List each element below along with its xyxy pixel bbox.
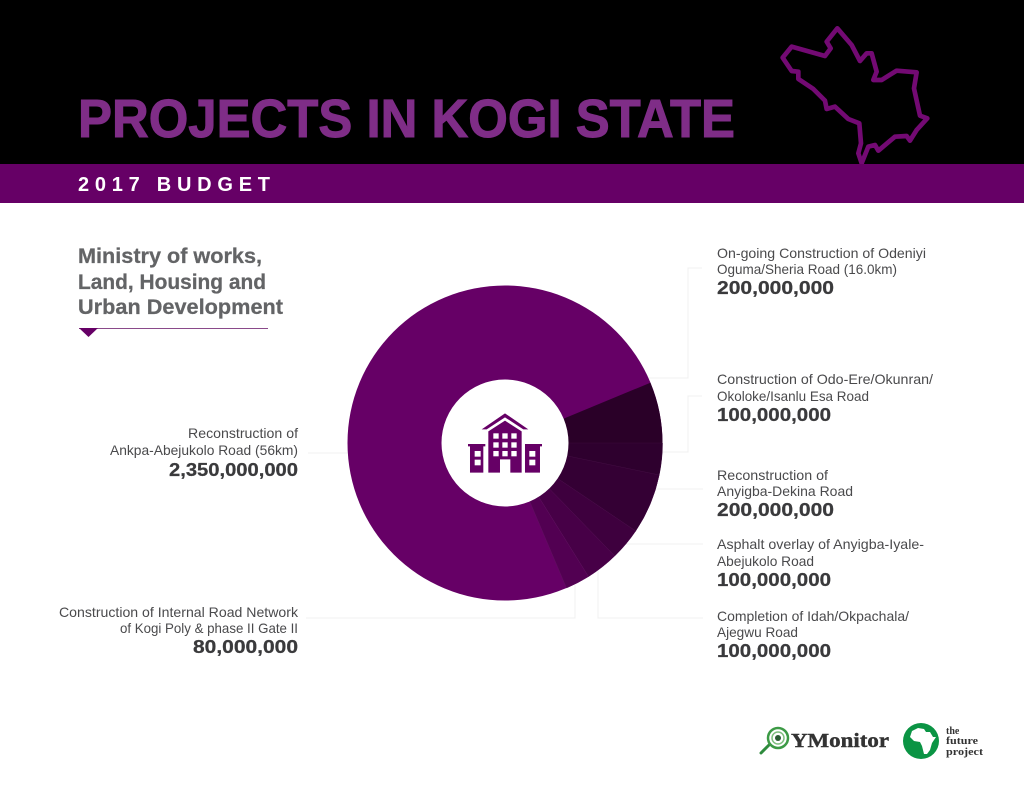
heading: ministry [78, 245, 283, 319]
label: Odeniyi: Oguma/Sheria Road (16.0km) [717, 261, 897, 277]
slice: Ankpa-Abejukolo [348, 286, 662, 600]
label: Ankpa-Abejukolo: Reconstruction of [188, 425, 298, 441]
slice: Odo-Ere [505, 443, 662, 475]
label: Ankpa-Abejukolo: Ankpa-Abejukolo Road (56km) [110, 442, 298, 458]
heading: ministry: Ministry of works, [78, 245, 262, 268]
label: Asphalt overlay: 100,000,000 [717, 570, 831, 590]
logo: YMonitor: YMonitor [791, 730, 889, 752]
slice: Kogi Poly [505, 443, 588, 588]
label: Odeniyi: 200,000,000 [717, 278, 834, 298]
heading: ministry: Land, Housing and [78, 271, 266, 294]
label: Odo-Ere: Construction of Odo-Ere/Okunran/ [717, 371, 933, 387]
leader lines [306, 268, 703, 618]
label: Odo-Ere: Okoloke/Isanlu Esa Road [717, 388, 869, 404]
label: Kogi Poly [59, 604, 299, 657]
label: Odo-Ere [717, 371, 933, 425]
label: Anyigba-Dekina: Reconstruction of [717, 467, 828, 483]
subtitle: 2017 BUDGET [78, 174, 270, 196]
label: Idah [717, 608, 909, 661]
title: PROJECTS IN KOGI STATE [78, 89, 735, 149]
centre hole [442, 380, 568, 506]
label: Anyigba-Dekina [717, 467, 853, 520]
label: Kogi Poly: Construction of Internal Road Network [59, 604, 299, 620]
subtitle band [0, 164, 1024, 203]
label: Odeniyi [717, 245, 926, 298]
label: Odo-Ere: 100,000,000 [717, 405, 831, 425]
header band [0, 0, 1024, 164]
slice: Odeniyi [505, 383, 662, 443]
label: Kogi Poly: of Kogi Poly & phase II Gate II [120, 620, 298, 636]
slice: Anyigba-Dekina [505, 443, 659, 531]
logo: the future project: project [946, 747, 984, 758]
label: Idah: Completion of Idah/Okpachala/ [717, 608, 909, 624]
icon: building [468, 413, 542, 473]
icon: Kogi state map outline [783, 28, 927, 163]
label: Asphalt overlay: Abejukolo Road [717, 553, 814, 569]
donut chart [348, 286, 662, 600]
logo: YMonitor [761, 728, 889, 753]
label: Kogi Poly: 80,000,000 [193, 637, 298, 657]
label: Ankpa-Abejukolo: 2,350,000,000 [169, 460, 298, 480]
logo: the future project: the [946, 726, 960, 737]
heading: ministry: Urban Development [78, 296, 283, 319]
slice: Asphalt overlay [505, 443, 636, 556]
slice: Idah [505, 443, 615, 577]
icon: magnifier [761, 728, 788, 753]
label: Odeniyi: On-going Construction of Odeniyi [717, 245, 926, 261]
label: Idah: Ajegwu Road [717, 624, 798, 640]
logo: the future project: future [946, 736, 979, 747]
label: Anyigba-Dekina: Anyigba-Dekina Road [717, 483, 853, 499]
label: Asphalt overlay: Asphalt overlay of Anyigba-Iyale- [717, 536, 924, 552]
label: Asphalt overlay [717, 536, 924, 590]
logo: the future project [903, 723, 984, 759]
heading underline marker [79, 328, 268, 337]
label: Ankpa-Abejukolo [110, 425, 298, 480]
label: Idah: 100,000,000 [717, 641, 831, 661]
label: Anyigba-Dekina: 200,000,000 [717, 500, 834, 520]
